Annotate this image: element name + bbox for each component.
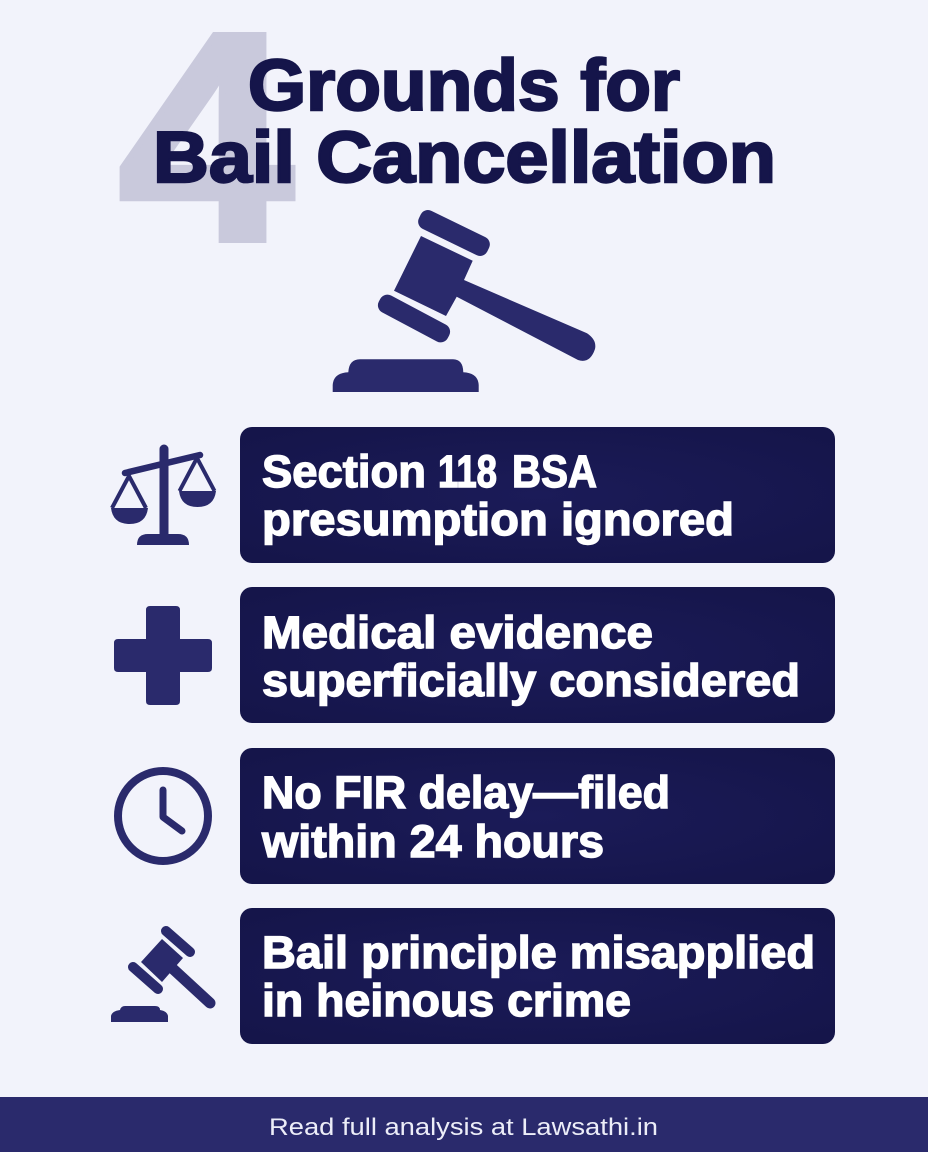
panel: Bail principle misapplied: in heinous crime <box>262 975 631 1026</box>
icon: small gavel <box>111 931 210 1022</box>
title: Bail Cancellation <box>153 118 776 198</box>
icon: large gavel <box>333 207 595 392</box>
title: Grounds for <box>248 46 680 126</box>
footer bar <box>0 1097 928 1152</box>
panel: No FIR delay: within 24 hours <box>261 816 604 867</box>
panel: Section 118 BSA: 118 <box>438 446 497 497</box>
icon: scales of justice <box>111 444 216 545</box>
panel: Bail principle misapplied <box>240 908 835 1044</box>
panel: Section 118 BSA <box>240 427 835 563</box>
panel: Section 118 BSA: Section <box>262 446 426 497</box>
icon: clock <box>118 771 208 861</box>
panel: Section 118 BSA: BSA <box>512 446 597 497</box>
icon: medical cross <box>114 606 212 705</box>
footer bar: Read full analysis at Lawsathi.in <box>269 1114 658 1141</box>
panel: Medical evidence: superficially considered <box>262 655 800 706</box>
panel: No FIR delay <box>240 748 835 884</box>
panel: Bail principle misapplied: Bail principle misapplied <box>262 927 815 978</box>
title <box>153 46 776 198</box>
panel: No FIR delay: No FIR delay—filed <box>262 767 670 818</box>
panel: Section 118 BSA: presumption ignored <box>262 494 734 545</box>
panel: Medical evidence <box>240 587 835 723</box>
panel: Medical evidence: Medical evidence <box>262 607 653 658</box>
